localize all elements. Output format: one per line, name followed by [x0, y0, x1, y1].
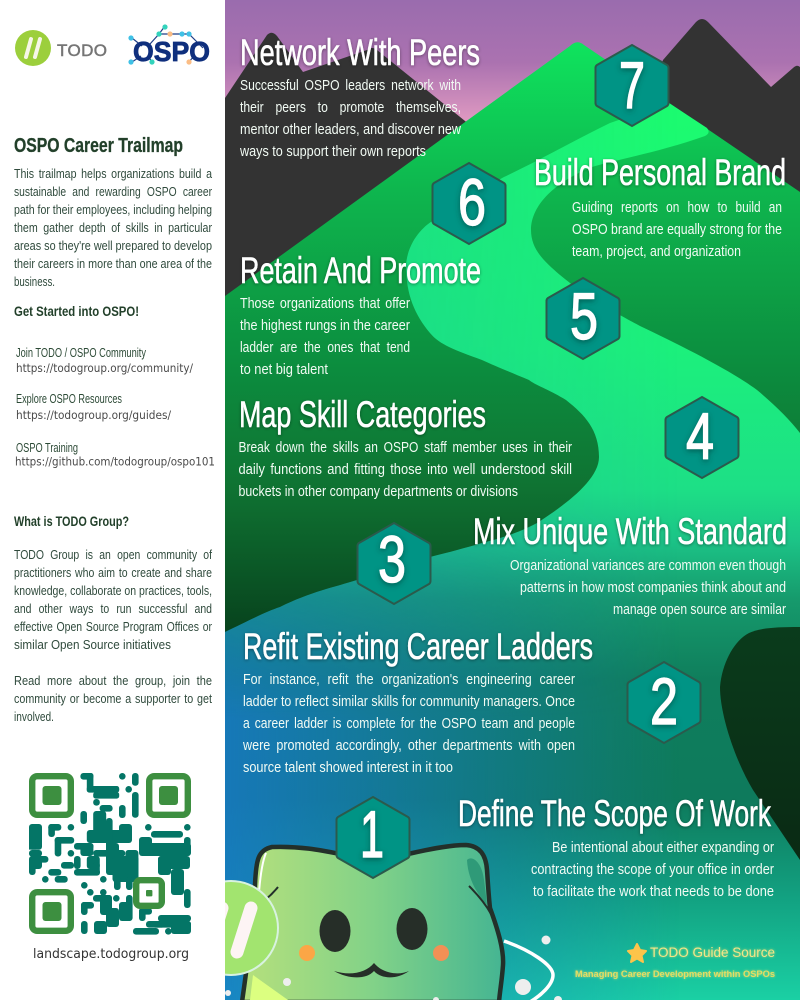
step 2 text: Refit Existing Career Ladders: [243, 626, 593, 667]
step 3 hexagon: [358, 522, 430, 604]
text: intro paragraph: sustainable and rewarding OSPO career: [14, 185, 212, 199]
trail and lower ground: [225, 103, 800, 1000]
logo: TODO: [15, 30, 107, 66]
step 4 text: Break down the skills an OSPO staff member uses in their: [238, 440, 572, 456]
text: intro paragraph: areas so they're well prepared to develop: [14, 239, 212, 253]
links list: [15, 345, 215, 468]
source note: [575, 944, 775, 980]
links list: OSPO Training: [16, 440, 78, 455]
step 6 hexagon: 6: [458, 165, 486, 239]
step 1 text: to facilitate the work that needs to be done: [533, 884, 774, 900]
step 1 hexagon: 1: [360, 797, 384, 871]
logo: OSPO: OSPO: [133, 36, 210, 67]
step 2 text: [242, 626, 593, 776]
QR code: [29, 773, 191, 935]
step 2 text: source talent showed interest in it too: [243, 760, 453, 776]
step 5 text: [240, 250, 481, 378]
sidebar: [0, 0, 225, 1000]
step 7 text: mentor other leaders, and discover new: [240, 122, 461, 138]
step 2 text: a career ladder is complete for the OSPO team and people: [243, 716, 575, 732]
step 6 text: team, project, and organization: [572, 244, 741, 260]
mascot: [184, 845, 562, 1000]
yellow badge tail: [250, 975, 288, 1000]
source note: TODO Guide Source: [650, 944, 775, 960]
text: intro paragraph: [14, 167, 212, 289]
text: about TODO Group: practitioners who aim to create and share: [14, 566, 212, 580]
step 7 text: Network With Peers: [240, 32, 480, 73]
cheeks: [299, 945, 449, 961]
step 4 text: [238, 394, 572, 500]
text: intro paragraph: business.: [14, 275, 55, 289]
step 7 text: their peers to promote themselves,: [240, 100, 461, 116]
step 1 hexagon: [336, 797, 410, 878]
panel: trail landscape: [184, 0, 800, 1000]
text: about TODO Group: and other ways to run successful and: [14, 602, 212, 616]
dark mountains: [225, 19, 800, 300]
step 2 text: ladder to reflect similar skills for community managers. Once: [243, 694, 575, 710]
step 2 text: For instance, refit the organization's engineering career: [243, 672, 575, 688]
ear patch: [467, 858, 487, 905]
logo: OSPO: [128, 24, 210, 67]
step 4 text: buckets in other company departments or divisions: [238, 484, 518, 500]
eyes: [320, 908, 428, 952]
source note: Managing Career Development within OSPOs: [575, 969, 775, 980]
step 5 hexagon: [546, 278, 620, 359]
step 1 text: [458, 793, 774, 900]
text: intro paragraph: their careers in more than one area of the: [14, 257, 212, 271]
logo: TODO: TODO: [57, 41, 107, 60]
step 4 text: daily functions and fitting those into well understood skill: [238, 462, 572, 478]
step 2 hexagon: 2: [650, 664, 678, 738]
text: about TODO Group: TODO Group is an open community of: [14, 548, 212, 562]
step 5 text: to net big talent: [240, 362, 328, 378]
QR caption: landscape.todogroup.org: [33, 947, 189, 962]
sky: [225, 0, 800, 122]
step 5 hexagon: 5: [570, 279, 598, 353]
text: about TODO Group: similar Open Source initiatives: [14, 638, 171, 652]
heading: What is TODO Group: What is TODO Group?: [14, 514, 129, 529]
text: intro paragraph: This trailmap helps organizations build a: [14, 167, 212, 181]
text: about TODO Group: effective Open Source Program Offices or: [14, 620, 212, 634]
step 7 text: ways to support their own reports: [239, 144, 426, 160]
dark ground corner: [720, 627, 800, 860]
text: about TODO Group: knowledge, collaborate on practices, tools,: [14, 584, 212, 598]
mouth: [334, 963, 409, 977]
step 5 text: Those organizations that offer: [240, 296, 410, 312]
icon: star: [628, 944, 646, 962]
step 7 text: [239, 32, 480, 160]
logo badge: [225, 880, 279, 976]
step 5 text: the highest rungs in the career: [240, 318, 410, 334]
step 7 text: Successful OSPO leaders network with: [240, 78, 461, 94]
links list: https://todogroup.org/guides/: [16, 408, 171, 422]
text: intro paragraph: path for their employees, including helping: [14, 203, 212, 217]
step 5 text: ladder are the ones that tend: [240, 340, 410, 356]
step 3 text: [473, 511, 787, 618]
text: about TODO Group: [14, 548, 212, 724]
step 5 text: Retain And Promote: [240, 250, 481, 291]
step 4 hexagon: [666, 397, 738, 478]
text: intro paragraph: them gather depth of skills in particular: [14, 221, 212, 235]
step 7 hexagon: [596, 45, 668, 126]
links list: Join TODO / OSPO Community: [16, 345, 146, 360]
links list: https://github.com/todogroup/ospo101: [15, 454, 215, 468]
step 3 hexagon: 3: [378, 522, 406, 596]
step 6 hexagon: [432, 163, 506, 244]
step 6 text: [534, 152, 786, 260]
step 4 hexagon: 4: [686, 399, 714, 473]
heading: Get Started: Get Started into OSPO!: [14, 304, 139, 319]
step 7 hexagon: 7: [619, 48, 645, 122]
green mountain: [225, 42, 800, 640]
heading: OSPO Career Trailmap: OSPO Career Trailmap: [14, 134, 183, 157]
links list: Explore OSPO Resources: [16, 391, 122, 406]
text: about TODO Group: Read more about the group, join the: [14, 674, 212, 688]
step 4 text: Map Skill Categories: [239, 394, 486, 435]
text: about TODO Group: involved.: [14, 710, 54, 724]
links list: https://todogroup.org/community/: [16, 361, 193, 375]
orbit ring and dots: [225, 936, 562, 1000]
text: about TODO Group: community or become a supporter to get: [14, 692, 212, 706]
step 2 hexagon: [628, 662, 700, 743]
step 2 text: were promoted accordingly, other departments with open: [242, 738, 575, 754]
